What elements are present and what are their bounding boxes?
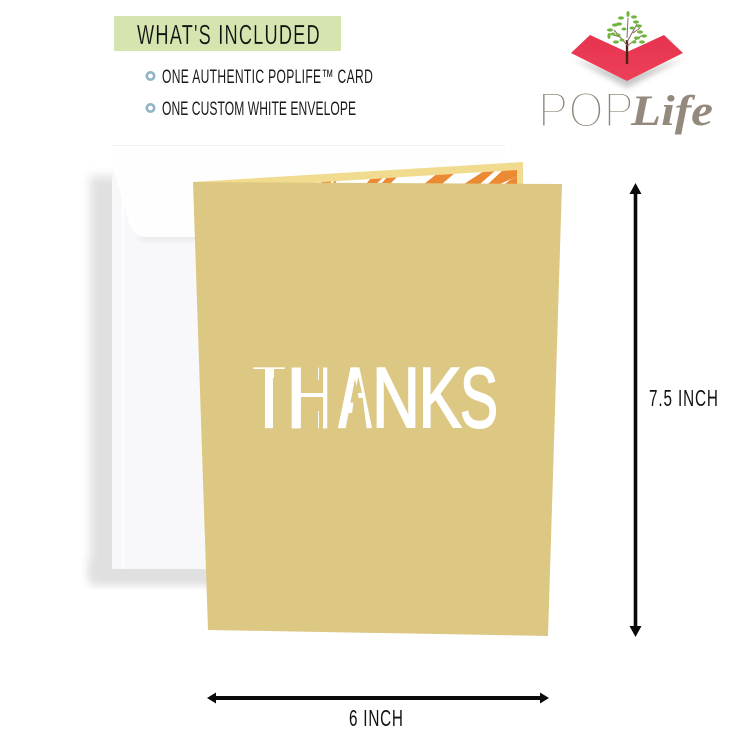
greeting card [193, 162, 562, 636]
list item: envelope: ONE CUSTOM WHITE ENVELOPE [162, 98, 356, 120]
icon: red open book [571, 35, 683, 81]
wordmark: POP: POP [538, 82, 634, 138]
logo shadow [572, 58, 684, 88]
panel: what's included [114, 16, 373, 120]
envelope flap edge [112, 162, 123, 569]
list item: card: ONE AUTHENTIC POPLIFE™ CARD [162, 66, 373, 88]
wordmark: Life: Life [630, 88, 713, 135]
card greeting cut-out: H [288, 350, 331, 447]
envelope shadow [90, 176, 220, 582]
card greeting cut-out: N [372, 351, 420, 446]
icon: tree [607, 11, 647, 64]
flap shadow [140, 234, 260, 240]
card greeting cut-out: K [418, 351, 462, 446]
label: width: 6 INCH [349, 706, 403, 732]
envelope [90, 145, 505, 584]
card greeting cut-out: T [253, 350, 285, 447]
label: height: 7.5 INCH [649, 386, 718, 412]
logo: PopLife [538, 11, 713, 138]
card back panel [193, 162, 523, 186]
heading band [114, 16, 341, 51]
envelope top edge [112, 145, 505, 146]
envelope body [112, 145, 505, 569]
heading: WHAT'S INCLUDED [137, 20, 320, 51]
bullet icon: envelope [147, 104, 154, 112]
card greeting cut-out: A [337, 350, 373, 447]
card front panel [193, 182, 562, 636]
arrow: width dimension [207, 692, 549, 704]
envelope flap [112, 145, 505, 237]
bullet icon: card [147, 72, 154, 80]
card greeting cut-out: S [460, 351, 498, 446]
envelope bottom shadow [90, 560, 390, 584]
stencil cuts [251, 362, 367, 431]
card inside stripes [309, 170, 517, 184]
arrow: height dimension [630, 183, 642, 637]
card greeting cut-out [251, 350, 498, 447]
